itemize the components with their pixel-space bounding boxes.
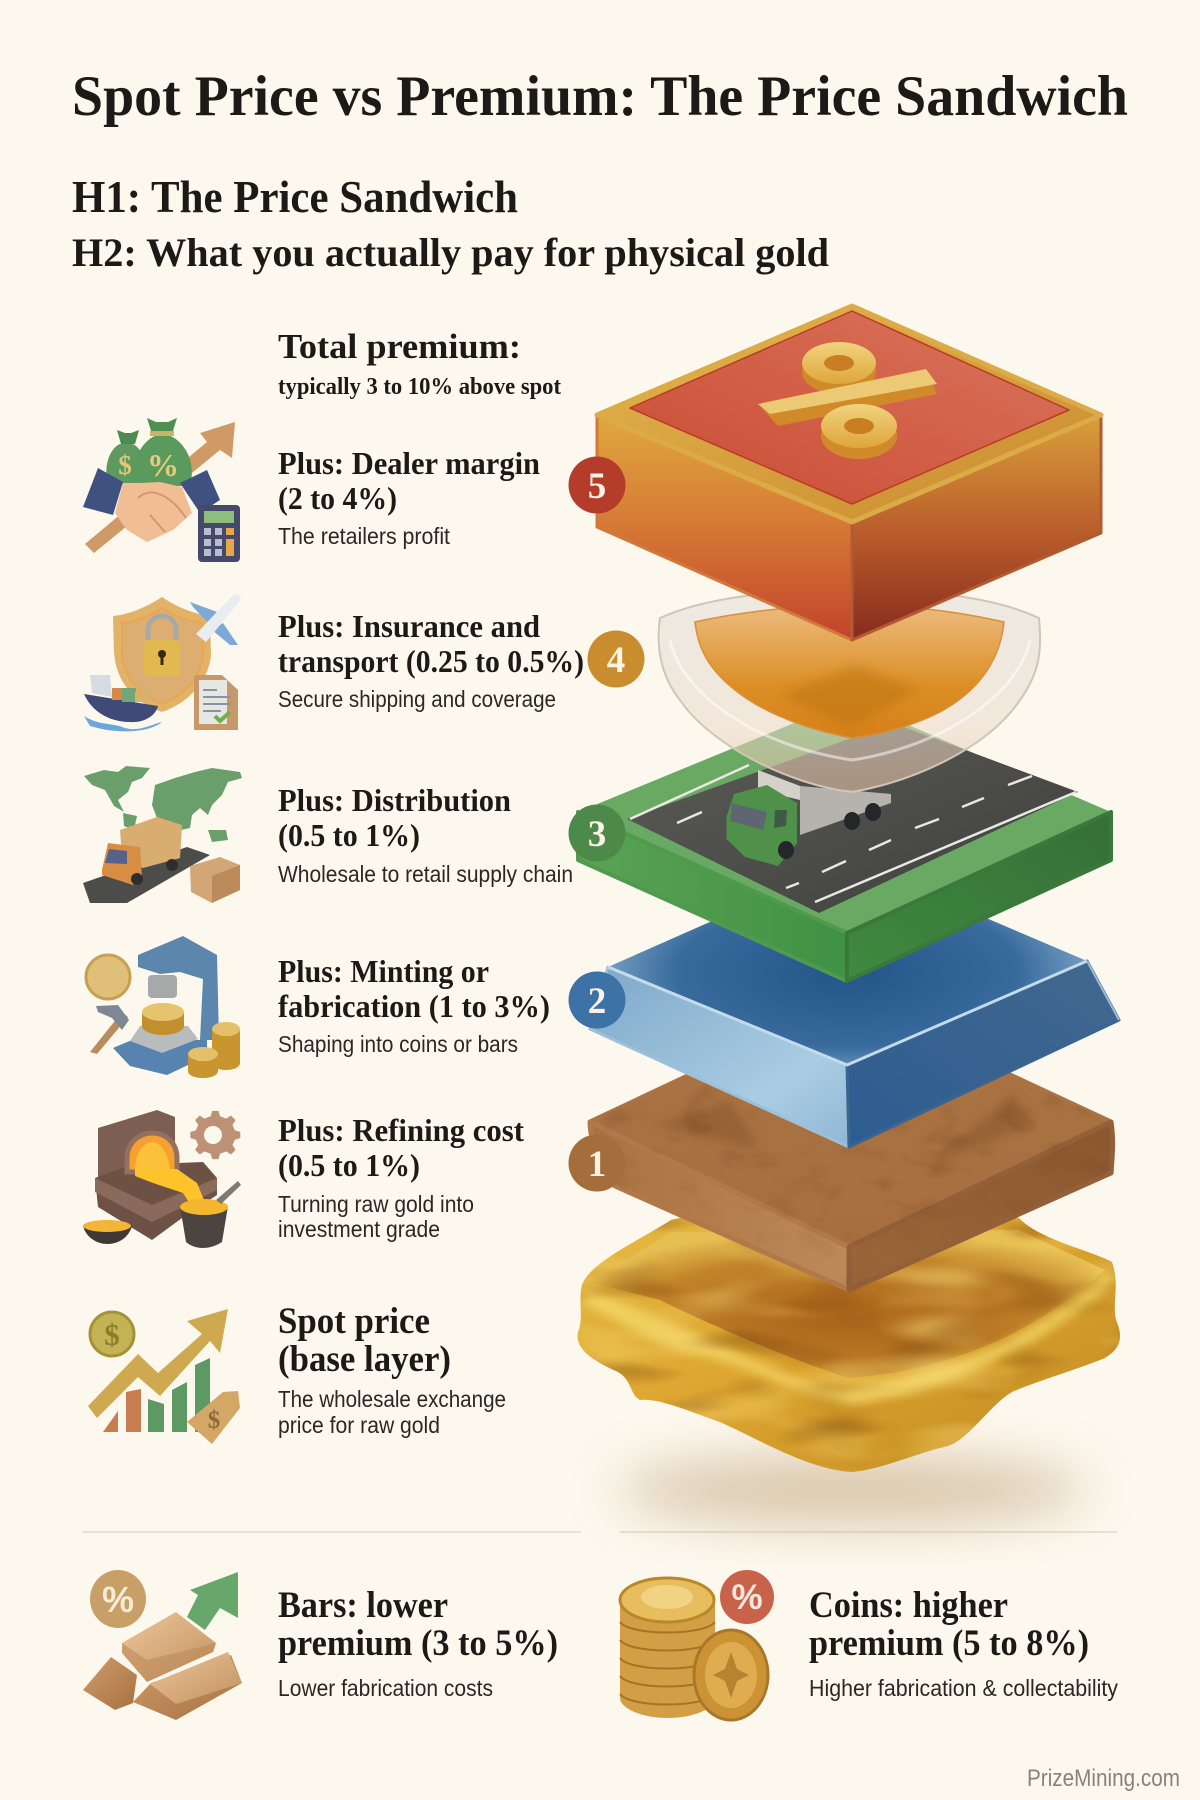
- badge 4: 4: [607, 640, 625, 681]
- text block: bars: Bars: lower: [278, 1585, 448, 1626]
- text block: refining: [278, 1112, 524, 1242]
- text block: insurance and transport: [278, 608, 584, 712]
- layer 4: insurance glass shield: [659, 590, 1040, 792]
- icon: spot price: $: [104, 1317, 120, 1352]
- text block: insurance and transport: Plus: Insurance and: [278, 608, 540, 644]
- icon: spot price: [88, 1309, 240, 1444]
- icon: bars: %: [102, 1579, 134, 1620]
- heading: H1: H1: The Price Sandwich: [72, 171, 518, 222]
- badge 5: 5: [588, 466, 606, 507]
- text block: dealer margin: [278, 445, 540, 549]
- text block: coins: [809, 1585, 1118, 1701]
- text block: total premium: [278, 327, 561, 400]
- icon: coins: %: [731, 1578, 763, 1617]
- icon: distribution: [83, 766, 242, 903]
- text block: coins: Coins: higher: [809, 1585, 1008, 1626]
- text block: coins: premium (5 to 8%): [809, 1623, 1089, 1664]
- layer 1: refining brown slab: [590, 1000, 1113, 1290]
- text block: minting: Shaping into coins or bars: [278, 1031, 518, 1057]
- layer 3: distribution green road slab: [578, 700, 1111, 981]
- layer: gold nugget base: [570, 1200, 1130, 1524]
- badge 5: [568, 456, 626, 514]
- truck: [726, 770, 891, 866]
- icon: dealer margin: [83, 418, 240, 562]
- text block: minting: Plus: Minting or: [278, 953, 489, 989]
- badge 4: [588, 630, 644, 688]
- icon: dealer margin: %: [147, 447, 179, 483]
- divider right: [620, 1531, 1117, 1533]
- text block: refining: Turning raw gold into: [278, 1191, 474, 1217]
- text block: refining: (0.5 to 1%): [278, 1147, 420, 1183]
- text block: spot price: (base layer): [278, 1339, 451, 1380]
- badge 3: 3: [588, 814, 606, 855]
- text block: refining: Plus: Refining cost: [278, 1112, 524, 1148]
- text block: insurance and transport: Secure shipping and coverage: [278, 686, 556, 712]
- text block: total premium: typically 3 to 10% above spot: [278, 374, 561, 400]
- text block: spot price: [278, 1301, 506, 1438]
- title: Spot Price vs Premium: The Price Sandwich: [72, 65, 1128, 128]
- icon: bars: [83, 1570, 242, 1720]
- icon: minting: [86, 936, 240, 1078]
- text block: bars: Lower fabrication costs: [278, 1675, 493, 1701]
- text block: bars: [278, 1585, 558, 1701]
- text block: refining: investment grade: [278, 1216, 440, 1242]
- badge 3: [568, 804, 626, 862]
- text block: minting: fabrication (1 to 3%): [278, 988, 550, 1024]
- text block: distribution: (0.5 to 1%): [278, 817, 420, 853]
- text block: distribution: [278, 782, 573, 887]
- badge 1: [568, 1134, 626, 1192]
- text block: distribution: Plus: Distribution: [278, 782, 511, 818]
- watermark: PrizeMining.com: [1027, 1765, 1180, 1792]
- layer 2: minting blue bar: [590, 860, 1119, 1147]
- divider left: [82, 1531, 581, 1533]
- icon: insurance and transport: [84, 594, 241, 731]
- icon: dealer margin: $: [118, 450, 132, 480]
- text block: insurance and transport: transport (0.25 to 0.5%): [278, 643, 584, 679]
- text block: spot price: Spot price: [278, 1301, 430, 1342]
- heading: H2: H2: What you actually pay for physical gold: [72, 230, 829, 275]
- text block: dealer margin: The retailers profit: [278, 523, 451, 549]
- text block: dealer margin: Plus: Dealer margin: [278, 445, 540, 481]
- text block: spot price: The wholesale exchange: [278, 1386, 506, 1412]
- layer 5: dealer margin red block: [597, 306, 1101, 640]
- percent sign: [758, 342, 937, 459]
- icon: coins: [620, 1570, 774, 1720]
- icon: spot price: $: [208, 1407, 220, 1434]
- icon: refining: [83, 1110, 241, 1248]
- badge 1: 1: [588, 1144, 606, 1185]
- badge 2: 2: [588, 981, 606, 1022]
- text block: dealer margin: (2 to 4%): [278, 480, 397, 516]
- text block: bars: premium (3 to 5%): [278, 1623, 558, 1664]
- text block: spot price: price for raw gold: [278, 1412, 440, 1438]
- text block: distribution: Wholesale to retail supply chain: [278, 861, 573, 887]
- text block: coins: Higher fabrication & collectability: [809, 1675, 1118, 1701]
- badge 2: [568, 972, 626, 1028]
- text block: total premium: Total premium:: [278, 327, 521, 366]
- text block: minting: [278, 953, 550, 1057]
